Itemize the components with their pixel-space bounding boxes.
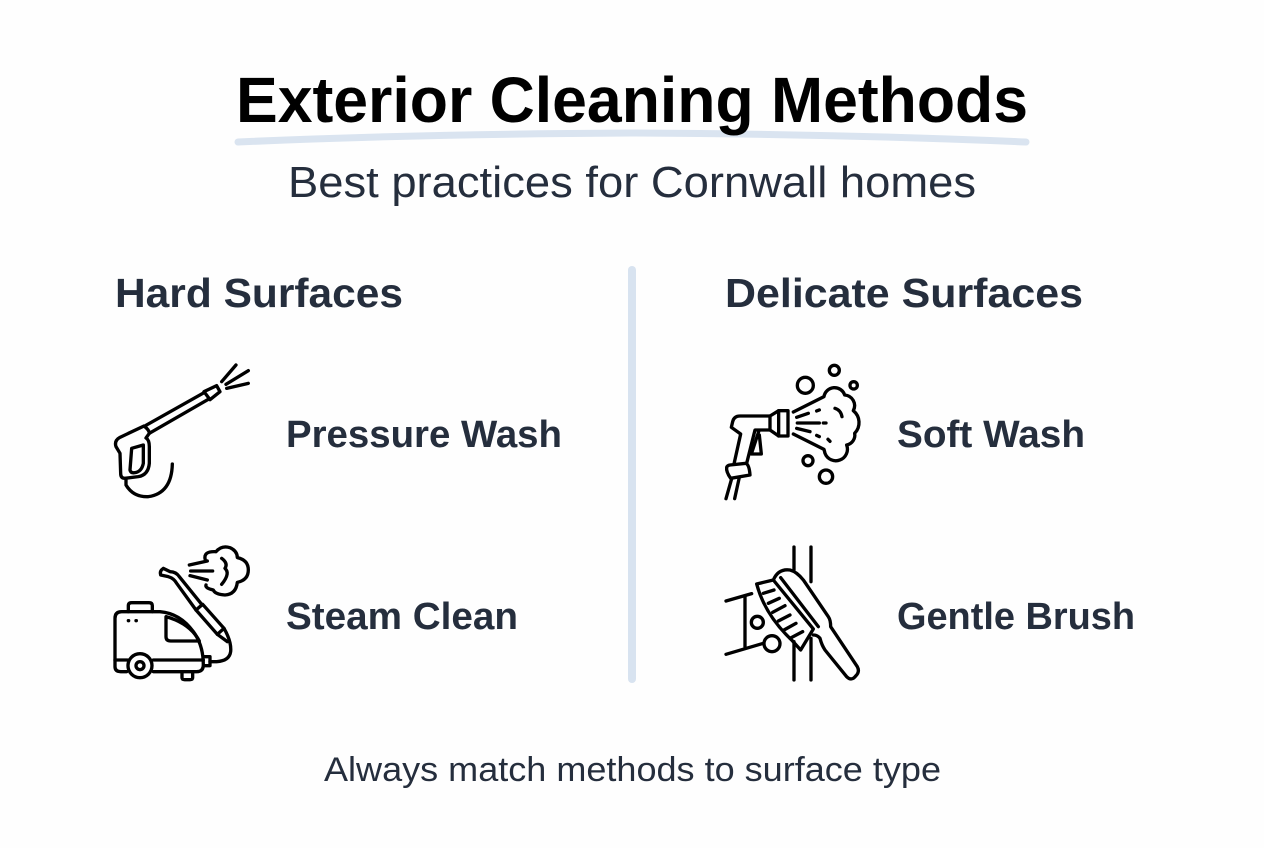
label: soft wash: Soft Wash <box>897 414 1085 456</box>
center divider <box>628 266 636 683</box>
title underline <box>238 133 1026 142</box>
subtitle: Best practices for Cornwall homes <box>288 158 976 207</box>
icon: pressure washer <box>115 365 248 497</box>
label: gentle brush: Gentle Brush <box>897 596 1135 638</box>
icon: gentle brush <box>726 547 858 680</box>
icon: soft wash nozzle <box>726 365 859 499</box>
heading: hard surfaces: Hard Surfaces <box>115 270 403 316</box>
footer note: Always match methods to surface type <box>324 751 941 789</box>
label: pressure wash: Pressure Wash <box>286 414 562 456</box>
icon: steam cleaner <box>115 547 248 680</box>
label: steam clean: Steam Clean <box>286 596 518 638</box>
title: Exterior Cleaning Methods <box>236 64 1028 136</box>
heading: delicate surfaces: Delicate Surfaces <box>725 270 1083 316</box>
